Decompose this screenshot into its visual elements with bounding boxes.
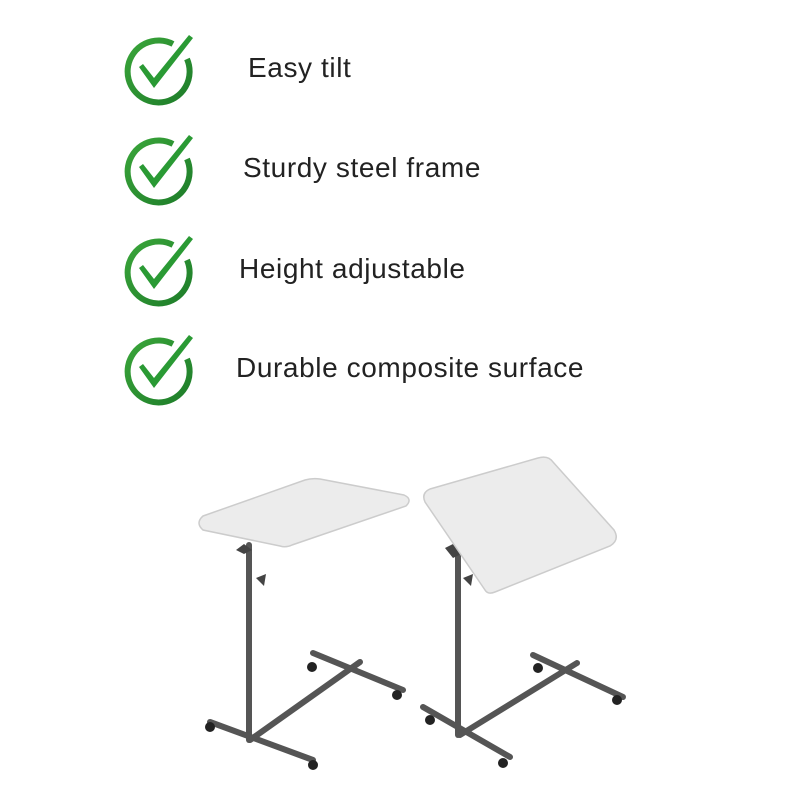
icon: check 4	[128, 335, 193, 402]
text: durable composite surface: Durable composite surface	[236, 352, 584, 383]
icon: check 2	[128, 135, 193, 202]
icon: check 1	[128, 35, 193, 102]
left table	[199, 479, 409, 770]
icon: check 3	[128, 236, 193, 303]
text: height adjustable: Height adjustable	[239, 253, 466, 284]
text: easy tilt: Easy tilt	[248, 52, 351, 83]
right table	[423, 457, 623, 768]
text: sturdy steel frame: Sturdy steel frame	[243, 152, 481, 183]
